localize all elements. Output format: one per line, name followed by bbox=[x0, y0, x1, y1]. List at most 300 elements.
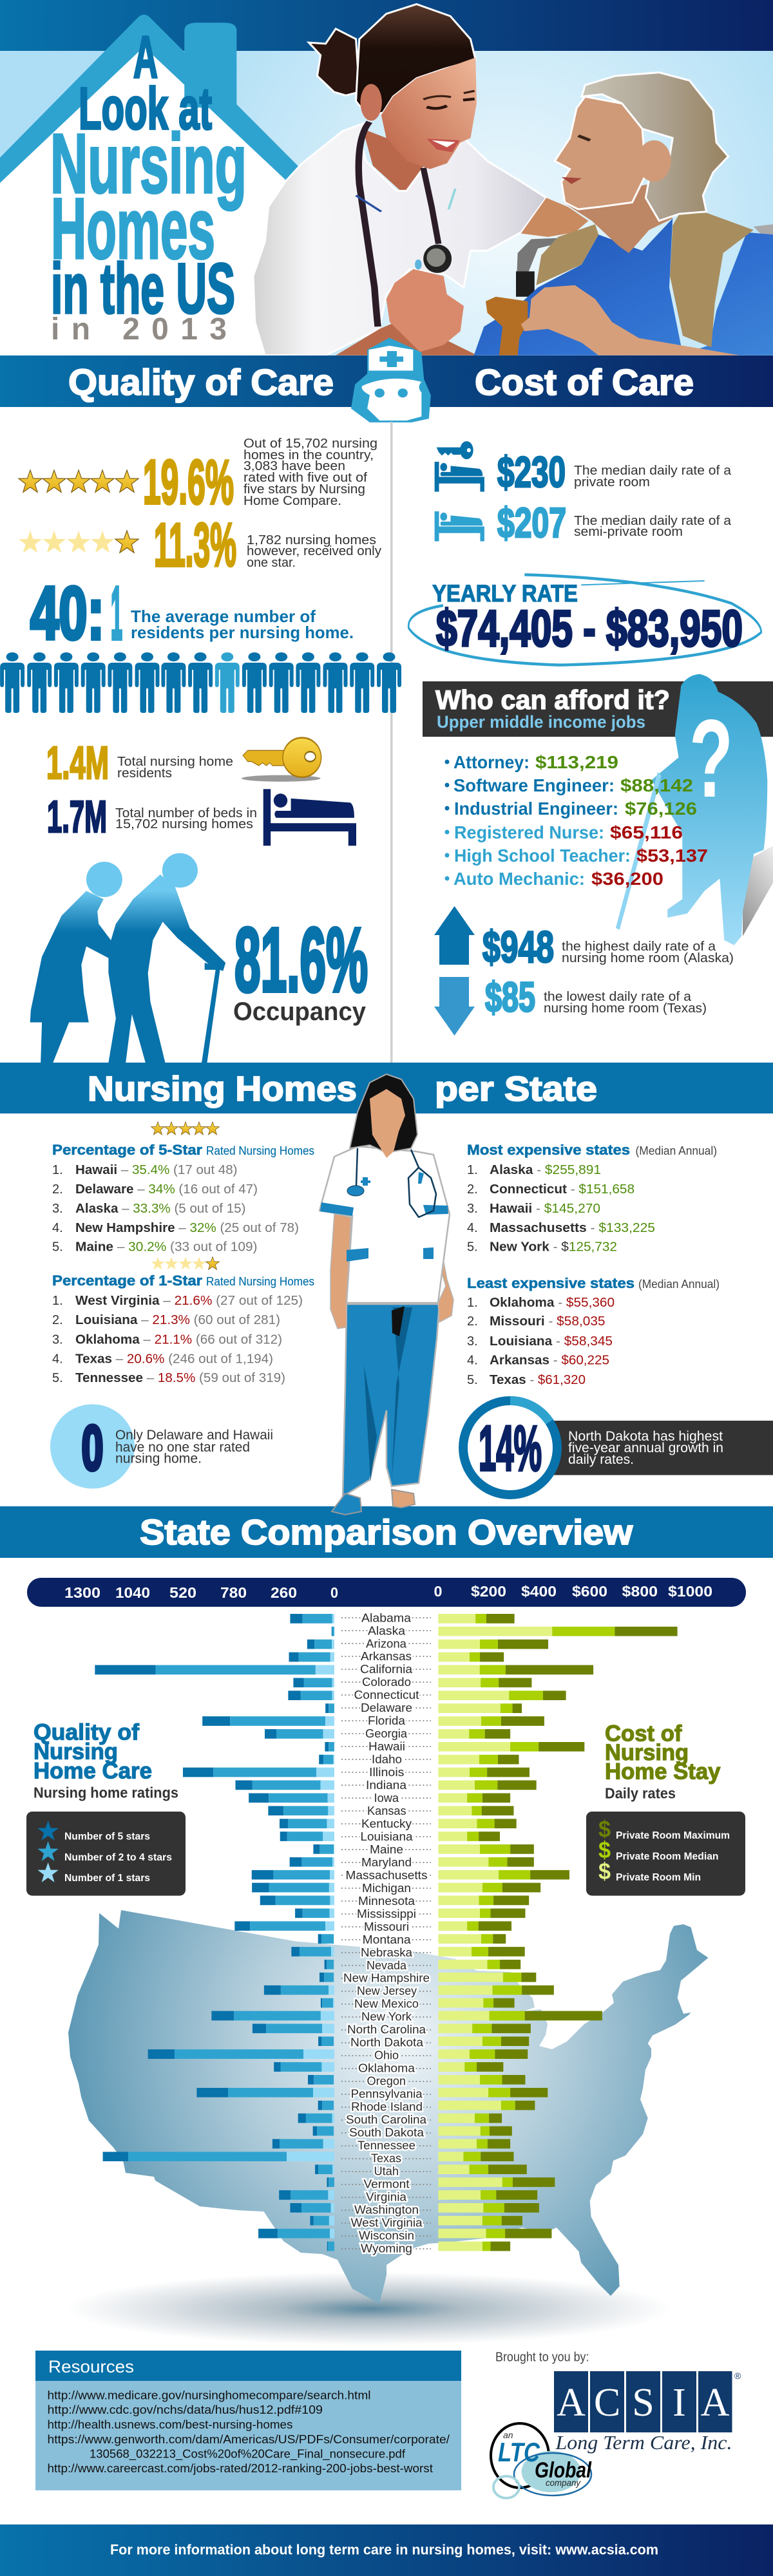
nurse face bbox=[381, 57, 477, 169]
subheading: nursing home ratings: Nursing home ratings bbox=[33, 1785, 178, 1801]
nurse hair bbox=[356, 4, 475, 116]
stat: 1.4M: 1.4M bbox=[46, 738, 109, 789]
panel: most and least expensive states bbox=[463, 1142, 773, 1495]
salary list: $88,142 bbox=[620, 775, 693, 795]
subheading: daily rates: Daily rates bbox=[605, 1785, 676, 1802]
heading: 5-star: Percentage of 5-Star bbox=[52, 1142, 202, 1158]
list: least expensive: Missouri - $58,035 bbox=[490, 1314, 606, 1329]
text: five star description: rated with five out of bbox=[243, 471, 367, 485]
bars: number of 1 stars bbox=[287, 1618, 334, 2233]
footer banner bbox=[0, 2524, 773, 2576]
list: top 1-star states: Texas – 20.6% (246 out of 1,194) bbox=[75, 1352, 273, 1367]
icon: elderly man with question mark bbox=[616, 674, 767, 945]
text: five star description: 3,083 have been bbox=[243, 459, 345, 473]
list: least expensive: Louisiana - $58,345 bbox=[490, 1334, 613, 1349]
icon: down arrow bbox=[434, 977, 475, 1036]
list: least expensive: 2. bbox=[467, 1314, 478, 1329]
state labels: Arkansas bbox=[361, 1649, 412, 1663]
state labels: Nevada bbox=[367, 1958, 407, 1972]
logo: ACSIA Long Term Care: A bbox=[701, 2381, 730, 2425]
logo: ACSIA Long Term Care: A bbox=[557, 2381, 586, 2425]
resident blouse bbox=[474, 218, 773, 355]
stat: 1.7M: 1.7M bbox=[47, 791, 107, 842]
state labels: Pennsylvania bbox=[351, 2087, 423, 2101]
panel: quality of care stats: 1 bbox=[111, 571, 122, 655]
resident face bbox=[555, 97, 645, 209]
section banner: nursing homes per state bbox=[0, 1063, 773, 1113]
list: least expensive: Arkansas - $60,225 bbox=[490, 1354, 609, 1368]
house graphic bbox=[0, 15, 305, 358]
legend: cost: Private Room Min bbox=[616, 1872, 701, 1883]
heading: least expensive: Least expensive states bbox=[467, 1275, 635, 1291]
callout: zero one-star homes: 0 bbox=[81, 1412, 103, 1483]
state labels: Florida bbox=[368, 1714, 406, 1727]
logo: LTC Global company bbox=[491, 2423, 592, 2498]
axis pill: 0 bbox=[434, 1583, 442, 1600]
axis pill: 780 bbox=[220, 1584, 247, 1601]
state labels: South Dakota bbox=[349, 2125, 425, 2139]
header background: sky bbox=[0, 51, 773, 356]
title: A bbox=[133, 24, 158, 90]
state labels: Iowa bbox=[374, 1791, 399, 1804]
bar chart: private room daily rates by state bbox=[438, 1618, 678, 2246]
state labels: South Carolina bbox=[346, 2112, 427, 2126]
text: one star description: 1,782 nursing homes bbox=[247, 533, 376, 547]
icon: nurse head bbox=[351, 337, 431, 422]
state labels: Nebraska bbox=[361, 1946, 413, 1959]
heading: cost of nursing home stay bbox=[605, 1721, 721, 1785]
list: least expensive: 4. bbox=[467, 1354, 478, 1368]
subheading: upper middle income jobs: Upper middle income jobs bbox=[437, 712, 645, 732]
state labels: Wisconsin bbox=[359, 2228, 414, 2242]
section banner: quality and cost of care: Cost of Care bbox=[475, 362, 694, 403]
state labels: Alaska bbox=[368, 1624, 406, 1637]
logo: ACSIA Long Term Care: ® bbox=[734, 2371, 741, 2381]
list: top 5-star states bbox=[52, 1163, 299, 1255]
text: semi-private room bbox=[574, 514, 732, 539]
nurse coat bbox=[253, 122, 546, 355]
text: residents ratio: residents per nursing home. bbox=[131, 623, 354, 642]
list: most expensive: New York - $125,732 bbox=[490, 1240, 617, 1255]
list: least expensive: Oklahoma - $55,360 bbox=[490, 1296, 615, 1310]
heading: cost of nursing home stay: Home Stay bbox=[605, 1759, 721, 1785]
five star row bbox=[151, 1122, 219, 1135]
text: private room: The median daily rate of a bbox=[574, 464, 732, 478]
resident hair bbox=[582, 72, 729, 221]
heading: least expensive bbox=[467, 1275, 720, 1291]
state labels: Mississippi bbox=[357, 1907, 416, 1920]
logo: LTC Global company: Global bbox=[535, 2458, 592, 2483]
panel: cost of care stats bbox=[408, 441, 773, 1036]
legend: cost: Private Room Median bbox=[616, 1852, 719, 1862]
state labels: Arizona bbox=[366, 1636, 407, 1650]
list: top 5-star states: Delaware – 34% (16 out of 47) bbox=[75, 1182, 258, 1197]
heading: 5-star: Rated Nursing Homes bbox=[206, 1144, 314, 1157]
text: five star description: Home Compare. bbox=[243, 494, 341, 508]
state labels: Michigan bbox=[362, 1881, 411, 1895]
text: beds: 15,702 nursing homes bbox=[115, 817, 253, 831]
nurse forearm and hands bbox=[336, 269, 477, 355]
list: most expensive: 4. bbox=[467, 1221, 478, 1235]
stat: $85: $85 bbox=[485, 974, 535, 1020]
bars: private room maximum bbox=[477, 1618, 678, 2246]
state labels: Oregon bbox=[367, 2074, 406, 2088]
text: private room bbox=[574, 464, 732, 489]
list: top 5-star states: 2. bbox=[52, 1182, 63, 1197]
state labels: Montana bbox=[363, 1933, 411, 1946]
title: in the US bbox=[51, 249, 235, 328]
list: most expensive: 2. bbox=[467, 1182, 478, 1197]
bars: private room min bbox=[438, 1618, 552, 2246]
salary list: High School Teacher: bbox=[454, 846, 631, 866]
resource links bbox=[48, 2389, 450, 2475]
title: in 2013 bbox=[51, 312, 227, 346]
state labels: Virginia bbox=[366, 2190, 407, 2203]
state labels: California bbox=[360, 1662, 413, 1676]
callout: zero one-star homes bbox=[50, 1404, 273, 1489]
callout: north dakota 14%: five-year annual growth in bbox=[568, 1441, 723, 1455]
heading: 1-star: Rated Nursing Homes bbox=[206, 1275, 314, 1288]
text: highest rate: the highest daily rate of a bbox=[562, 940, 716, 954]
axis pill: $1000 bbox=[668, 1583, 712, 1600]
text: five star description: five stars by Nursing bbox=[243, 482, 365, 497]
stat: 19.6%: 19.6% bbox=[143, 447, 234, 517]
state labels: Texas bbox=[371, 2151, 401, 2165]
callout: north dakota 14%: daily rates. bbox=[568, 1452, 634, 1467]
center divider bbox=[390, 422, 393, 1063]
panel: quality of care stats: 11.3% bbox=[154, 511, 236, 580]
list: top 5-star states: New Hampshire – 32% (25 out of 78) bbox=[75, 1221, 299, 1235]
salary list: $53,137 bbox=[636, 846, 708, 866]
legend: cost: $ bbox=[598, 1816, 611, 1842]
text: one star description: one star. bbox=[247, 556, 296, 570]
list: top 5-star states: 1. bbox=[52, 1163, 63, 1177]
heading: most expensive bbox=[467, 1142, 717, 1158]
text: residents ratio: The average number of bbox=[131, 607, 316, 626]
salary list: $113,219 bbox=[535, 752, 618, 772]
section banner: state comparison overview bbox=[0, 1506, 773, 1558]
resource links: https://www.genworth.com/dam/Americas/US/PDFs/Consumer/corporate/ bbox=[48, 2433, 450, 2446]
text: one star description: however, received only bbox=[247, 544, 381, 558]
state labels: New Hampshire bbox=[343, 1971, 430, 1985]
list: least expensive bbox=[467, 1296, 615, 1387]
state labels: Illinois bbox=[369, 1765, 405, 1779]
state labels: New Mexico bbox=[354, 1997, 419, 2011]
salary list: Attorney: bbox=[453, 752, 530, 772]
list: top 5-star states: 4. bbox=[52, 1221, 63, 1235]
heading: cost of nursing home stay: Nursing bbox=[605, 1740, 689, 1765]
legend: star ratings bbox=[26, 1812, 186, 1896]
state labels: Minnesota bbox=[358, 1894, 415, 1908]
list: least expensive: 3. bbox=[467, 1334, 478, 1349]
bars: number of 5 stars bbox=[95, 1618, 332, 2246]
list: top 1-star states: 3. bbox=[52, 1333, 63, 1347]
axis pill: $800 bbox=[622, 1583, 658, 1600]
list: top 1-star states: Louisiana – 21.3% (60 out of 281) bbox=[75, 1313, 280, 1327]
text: residents bbox=[117, 755, 233, 781]
legend: cost: $ bbox=[598, 1858, 611, 1884]
heading: quality of nursing home care bbox=[33, 1720, 152, 1784]
state labels: Delaware bbox=[361, 1701, 412, 1714]
list: least expensive: Texas - $61,320 bbox=[490, 1373, 586, 1387]
one star rating row bbox=[19, 531, 138, 553]
list: most expensive: Alaska - $255,891 bbox=[490, 1163, 601, 1177]
list: least expensive: 5. bbox=[467, 1373, 478, 1387]
resource links: http://www.medicare.gov/nursinghomecompare/search.html bbox=[48, 2389, 371, 2402]
nurse neck bbox=[363, 129, 430, 193]
title: Look at bbox=[79, 76, 212, 142]
state labels: New York bbox=[361, 2010, 412, 2023]
top gradient banner bbox=[0, 0, 773, 51]
callout: north dakota 14%: 14% bbox=[479, 1412, 542, 1484]
logo: LTC Global company: company bbox=[546, 2477, 581, 2488]
list: most expensive: Hawaii - $145,270 bbox=[490, 1202, 600, 1216]
icon: private room bed and key bbox=[435, 441, 484, 492]
five star rating row bbox=[19, 470, 138, 492]
axis pill: 1040 bbox=[115, 1584, 150, 1601]
list: most expensive bbox=[467, 1163, 655, 1255]
logo: ACSIA Long Term Care: Long Term Care, Inc. bbox=[555, 2431, 732, 2454]
callout: zero one-star homes: Only Delaware and Hawaii bbox=[115, 1428, 273, 1443]
one star row bbox=[151, 1257, 219, 1269]
logo: ACSIA Long Term Care bbox=[554, 2371, 741, 2454]
state labels: West Virginia bbox=[351, 2215, 423, 2229]
icon: up arrow bbox=[434, 906, 475, 965]
photo: nurse and elderly resident bbox=[253, 4, 773, 355]
state labels: Vermont bbox=[363, 2177, 410, 2190]
callout: north dakota 14%: North Dakota has highest bbox=[568, 1429, 723, 1444]
state labels: Alabama bbox=[361, 1611, 412, 1624]
resident neck bbox=[563, 184, 673, 253]
nurse ear bbox=[360, 84, 382, 120]
section banner: nursing homes per state: Nursing Homes bbox=[88, 1070, 357, 1108]
state labels: Connecticut bbox=[354, 1688, 419, 1701]
legend: star ratings: Number of 2 to 4 stars bbox=[64, 1852, 172, 1863]
list: top 1-star states: 4. bbox=[52, 1352, 63, 1367]
axis pill: $400 bbox=[521, 1583, 557, 1600]
salary list: $36,200 bbox=[591, 869, 663, 889]
state labels: Kentucky bbox=[361, 1817, 412, 1830]
legend: cost: Private Room Maximum bbox=[616, 1830, 730, 1841]
state labels: Ohio bbox=[374, 2049, 399, 2062]
text: private room: private room bbox=[574, 475, 650, 489]
salary list bbox=[444, 752, 708, 889]
US map background bbox=[67, 1910, 708, 2345]
heading: quality of nursing home care: Home Care bbox=[33, 1759, 152, 1784]
state labels: North Carolina bbox=[347, 2023, 426, 2036]
heading: resources: Resources bbox=[48, 2357, 134, 2376]
section banner: nursing homes per state: per State bbox=[435, 1070, 597, 1108]
state labels: Missouri bbox=[364, 1920, 409, 1933]
list: most expensive: Connecticut - $151,658 bbox=[490, 1182, 635, 1197]
list: top 5-star states: Hawaii – 35.4% (17 out 48) bbox=[75, 1163, 237, 1177]
list: top 1-star states: Tennessee – 18.5% (59 out of 319) bbox=[75, 1371, 285, 1385]
legend: cost: $ bbox=[598, 1837, 611, 1863]
heading: who can afford it: Who can afford it? bbox=[435, 685, 670, 715]
text: five star description bbox=[243, 437, 377, 508]
title bbox=[50, 24, 247, 346]
list: most expensive: 5. bbox=[467, 1240, 478, 1255]
axis pill: $600 bbox=[572, 1583, 607, 1600]
stat: $207: $207 bbox=[497, 499, 566, 546]
axis pill: $200 bbox=[471, 1583, 506, 1600]
text: lowest rate bbox=[544, 990, 707, 1016]
heading: 1-star bbox=[52, 1273, 314, 1289]
panel: 5-star and 1-star lists bbox=[50, 1122, 314, 1489]
axis pill: 260 bbox=[271, 1584, 297, 1601]
bars: number of 2 to 4 stars bbox=[128, 1618, 334, 2246]
text: residents: residents bbox=[117, 766, 172, 781]
title: Nursing bbox=[50, 116, 247, 211]
list: most expensive: 1. bbox=[467, 1163, 478, 1177]
logo: LTC Global company: LTC bbox=[498, 2437, 540, 2467]
state labels bbox=[343, 1611, 430, 2255]
resident vest bbox=[536, 213, 754, 347]
salary list: Registered Nurse: bbox=[454, 822, 604, 842]
list: top 5-star states: 3. bbox=[52, 1202, 63, 1216]
list: top 1-star states bbox=[52, 1294, 303, 1385]
text: five star description: Out of 15,702 nursing bbox=[243, 437, 377, 451]
state labels: Oklahoma bbox=[358, 2061, 415, 2075]
axis pill: 520 bbox=[169, 1584, 196, 1601]
state labels: Indiana bbox=[366, 1778, 407, 1792]
panel: resources bbox=[35, 2351, 461, 2490]
state labels: Wyoming bbox=[361, 2241, 412, 2255]
state labels: Idaho bbox=[372, 1752, 402, 1766]
nurse bun bbox=[309, 29, 359, 95]
bar chart: nursing home ratings by state bbox=[95, 1618, 334, 2246]
illustration: nurse figure bbox=[320, 1074, 453, 1515]
icon: semi-private bed bbox=[435, 511, 484, 542]
text: residents ratio bbox=[131, 607, 354, 642]
heading: most expensive: Most expensive states bbox=[467, 1142, 630, 1158]
list: most expensive: Massachusetts - $133,225 bbox=[490, 1221, 655, 1235]
heading: least expensive: (Median Annual) bbox=[638, 1278, 720, 1291]
text: highest rate bbox=[562, 940, 734, 965]
logo: ACSIA Long Term Care: C bbox=[594, 2381, 620, 2425]
axis pill bbox=[27, 1578, 746, 1607]
heading: 5-star bbox=[52, 1142, 314, 1158]
text: beds: Total number of beds in bbox=[115, 806, 257, 820]
resource links: http://health.usnews.com/best-nursing-homes bbox=[48, 2418, 293, 2431]
list: top 1-star states: 2. bbox=[52, 1313, 63, 1327]
footer banner: For more information about long term care in nursing homes, visit: www.acsia.com bbox=[110, 2542, 658, 2558]
logo: ACSIA Long Term Care: I bbox=[673, 2381, 686, 2425]
stethoscope bbox=[356, 122, 455, 327]
icon row: people bbox=[0, 652, 401, 713]
callout: zero one-star homes: nursing home. bbox=[115, 1452, 202, 1466]
state labels: Washington bbox=[354, 2202, 419, 2216]
list: top 5-star states: Maine – 30.2% (33 out of 109) bbox=[75, 1240, 258, 1255]
legend: cost bbox=[586, 1812, 745, 1896]
wheelchair bbox=[516, 224, 773, 297]
state labels: New Jersey bbox=[357, 1984, 417, 1998]
scribble ellipse bbox=[408, 574, 761, 665]
state labels: Colorado bbox=[362, 1675, 411, 1689]
icon: key bbox=[242, 738, 321, 782]
text: residents: Total nursing home bbox=[117, 755, 233, 769]
state labels: Maine bbox=[370, 1842, 403, 1856]
panel: who can afford it bbox=[423, 674, 773, 945]
list: top 5-star states: Alaska – 33.3% (5 out of 15) bbox=[75, 1202, 246, 1216]
nurse upper arm bbox=[521, 198, 588, 237]
text: lowest rate: the lowest daily rate of a bbox=[544, 990, 692, 1004]
state leader dots bbox=[341, 1618, 431, 2249]
text: five star description: homes in the country, bbox=[243, 448, 374, 462]
heading: cost of nursing home stay: Cost of bbox=[605, 1721, 682, 1746]
title: Homes bbox=[51, 181, 215, 277]
salary list: $76,126 bbox=[625, 799, 697, 819]
resource links: 130568_032213_Cost%20of%20Care_Final_nonsecure.pdf bbox=[90, 2448, 406, 2461]
legend: star ratings: Number of 1 stars bbox=[64, 1873, 150, 1884]
state labels: Louisiana bbox=[361, 1830, 413, 1843]
list: most expensive: 3. bbox=[467, 1202, 478, 1216]
section banner: state comparison overview: State Comparison Overview bbox=[140, 1512, 633, 1552]
icon shadow bbox=[705, 846, 773, 936]
icon: elderly couple bbox=[30, 853, 225, 1063]
text: semi-private room: semi-private room bbox=[574, 525, 683, 539]
bars: private room median bbox=[463, 1618, 615, 2246]
resident hand bbox=[521, 285, 740, 355]
cane handle bbox=[486, 297, 528, 355]
state labels: Massachusetts bbox=[345, 1868, 428, 1882]
text: semi-private room: The median daily rate of a bbox=[574, 514, 732, 528]
state labels: Tennessee bbox=[358, 2138, 415, 2152]
heading: quality of nursing home care: Nursing bbox=[33, 1739, 118, 1765]
section banner: quality and cost of care bbox=[0, 355, 773, 407]
stat: $948: $948 bbox=[482, 922, 554, 972]
state labels: Utah bbox=[374, 2164, 399, 2177]
logo: LTC Global company: an bbox=[503, 2430, 513, 2440]
state labels: Maryland bbox=[361, 1855, 412, 1869]
stat: 81.6% occupancy: 81.6% bbox=[234, 909, 368, 1010]
stat: $230: $230 bbox=[497, 448, 566, 497]
callout: north dakota 14% bbox=[463, 1401, 773, 1495]
state labels: North Dakota bbox=[350, 2036, 424, 2049]
text: one star description bbox=[247, 533, 381, 570]
salary list: $65,116 bbox=[610, 822, 683, 842]
section banner: quality and cost of care: Quality of Care bbox=[68, 362, 334, 403]
logo: ACSIA Long Term Care: S bbox=[632, 2381, 654, 2425]
text: beds bbox=[115, 806, 257, 831]
callout: zero one-star homes: have no one star rated bbox=[115, 1440, 250, 1455]
list: top 1-star states: 5. bbox=[52, 1371, 63, 1385]
icon: bed bbox=[263, 789, 356, 846]
state labels: Georgia bbox=[365, 1727, 408, 1740]
salary list: Industrial Engineer: bbox=[454, 799, 618, 819]
state labels: Hawaii bbox=[368, 1739, 405, 1753]
list: top 1-star states: Oklahoma – 21.1% (66 out of 312) bbox=[75, 1333, 282, 1347]
heading: yearly rate: YEARLY RATE bbox=[432, 580, 578, 607]
state labels: Kansas bbox=[367, 1804, 406, 1817]
stat: 40:1: 40: bbox=[30, 571, 104, 655]
list: top 5-star states: 5. bbox=[52, 1240, 63, 1255]
heading: 1-star: Percentage of 1-Star bbox=[52, 1273, 202, 1289]
icon: elderly man with question mark: ? bbox=[689, 697, 733, 820]
legend: star ratings: Number of 5 stars bbox=[64, 1832, 150, 1842]
salary list: Auto Mechanic: bbox=[453, 869, 585, 889]
salary list: Software Engineer: bbox=[453, 775, 615, 795]
axis pill: 1300 bbox=[64, 1584, 100, 1601]
resident ear bbox=[637, 140, 671, 182]
text: highest rate: nursing home room (Alaska) bbox=[562, 951, 734, 965]
text: lowest rate: nursing home room (Texas) bbox=[544, 1001, 707, 1016]
label: occupancy: Occupancy bbox=[233, 998, 367, 1026]
state labels: Rhode Island bbox=[351, 2099, 423, 2114]
resource links: http://www.cdc.gov/nchs/data/hus/hus12.pdf#109 bbox=[48, 2403, 323, 2416]
resource links: http://www.careercast.com/jobs-rated/2012-ranking-200-jobs-best-worst bbox=[48, 2462, 433, 2475]
list: least expensive: 1. bbox=[467, 1296, 478, 1310]
